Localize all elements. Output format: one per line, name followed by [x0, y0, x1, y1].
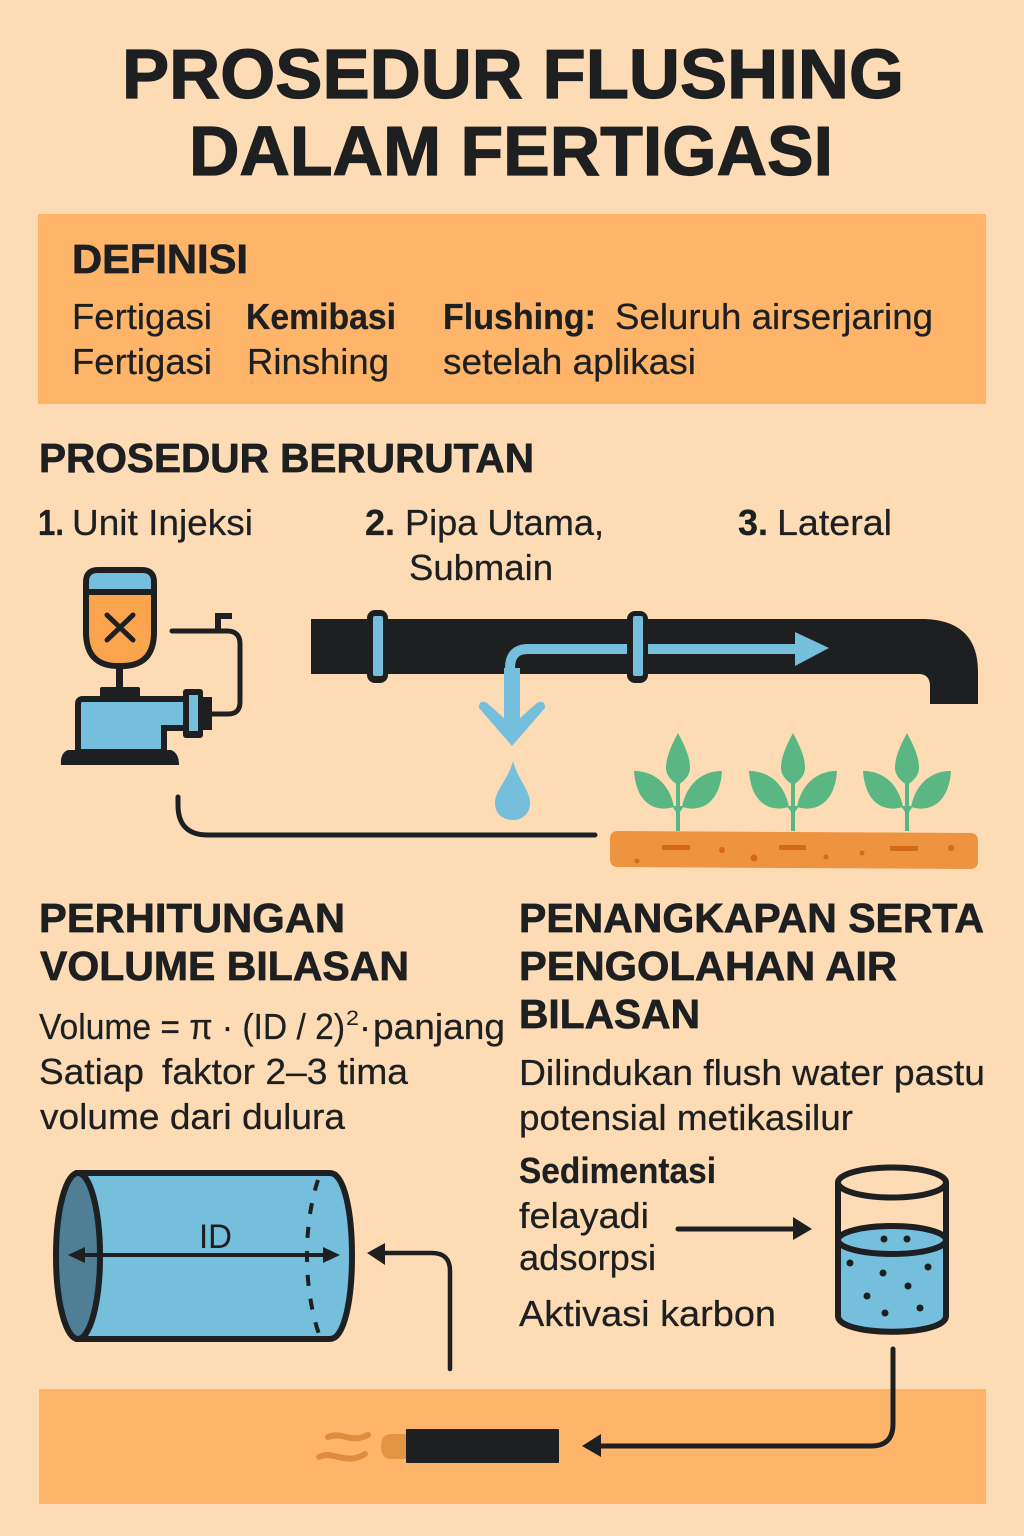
title: PROSEDUR FLUSHING [122, 35, 904, 113]
title: DALAM FERTIGASI [189, 112, 833, 190]
step labels: Submain [409, 547, 553, 588]
text block: treatment methods: Aktivasi karbon [519, 1293, 776, 1334]
arrow: inner diameter [68, 1247, 340, 1263]
step labels: Unit Injeksi [72, 502, 253, 543]
heading: definisi: DEFINISI [72, 236, 248, 282]
icon: water drop [495, 761, 530, 820]
arrow: tank to discharge [582, 1349, 893, 1457]
panel: definisi [38, 214, 986, 404]
step labels: 1. [38, 502, 64, 543]
icon: plants [634, 733, 951, 831]
heading: penangkapan serta pengolahan air bilasan: PENANGKAPAN SERTA [519, 895, 984, 941]
text block: definition: Kemibasi [246, 296, 396, 337]
label: ID: ID [199, 1218, 232, 1256]
text block: volume formula: faktor 2–3 tima [162, 1051, 409, 1092]
collar 2 [627, 611, 648, 683]
heading: perhitungan volume bilasan: VOLUME BILASAN [40, 943, 409, 989]
heading: perhitungan volume bilasan: PERHITUNGAN [39, 895, 345, 941]
arrow: methods to tank [678, 1217, 812, 1240]
heading: perhitungan volume bilasan [39, 895, 409, 989]
heading: penangkapan serta pengolahan air bilasan: PENGOLAHAN AIR [519, 943, 897, 989]
text block: volume formula: volume dari dulura [40, 1096, 346, 1137]
text block: volume formula: panjang [373, 1006, 505, 1047]
text block: definition: Seluruh airserjaring [615, 296, 933, 337]
text block: volume formula: · [359, 1006, 371, 1047]
text block: definition: Flushing: [443, 296, 596, 337]
step labels: Lateral [777, 502, 892, 543]
icon: outlet pipe [381, 1429, 559, 1463]
text block: volume formula: Volume = π · (ID / 2) [39, 1006, 345, 1047]
step labels: 2. [365, 502, 395, 543]
soil bed [610, 831, 978, 869]
step labels [38, 502, 892, 588]
text block: definition: setelah aplikasi [443, 341, 696, 382]
text block: treatment methods: adsorpsi [519, 1237, 656, 1278]
heading: prosedur berurutan: PROSEDUR BERURUTAN [39, 435, 534, 481]
title [122, 35, 904, 190]
text block: definition: Fertigasi [72, 341, 212, 382]
arrow: flow through pipe to emitter [479, 632, 829, 746]
text block: treatment methods: felayadi [519, 1195, 649, 1236]
text block: treatment methods [519, 1150, 776, 1334]
text block: treatment description: potensial metikasilur [519, 1097, 853, 1138]
heading: penangkapan serta pengolahan air bilasan: BILASAN [519, 991, 700, 1037]
text block: volume formula: Satiap [39, 1051, 144, 1092]
text block: definition: Fertigasi [72, 296, 212, 337]
text block: treatment description: Dilindukan flush water pastu [519, 1052, 985, 1093]
drain hose [178, 797, 595, 835]
step labels: Pipa Utama, [405, 502, 604, 543]
arrow: into cylinder [367, 1243, 450, 1369]
text block: treatment methods: Sedimentasi [519, 1150, 716, 1191]
step labels: 3. [738, 502, 768, 543]
text block: volume formula [39, 1006, 505, 1137]
icon: settling beaker [838, 1168, 946, 1332]
text block: volume formula: 2 [346, 1007, 359, 1030]
icon: injection unit [61, 570, 240, 765]
icon: water waves [319, 1435, 368, 1459]
heading: penangkapan serta pengolahan air bilasan [519, 895, 984, 1037]
icon: pipe cylinder with ID [56, 1173, 352, 1339]
text block: treatment description [519, 1052, 985, 1138]
text block: definition: Rinshing [247, 341, 389, 382]
panel: ground band [39, 1389, 986, 1504]
text block: definition [72, 296, 933, 382]
main pipe with lateral [311, 610, 978, 746]
collar 1 [367, 610, 388, 683]
